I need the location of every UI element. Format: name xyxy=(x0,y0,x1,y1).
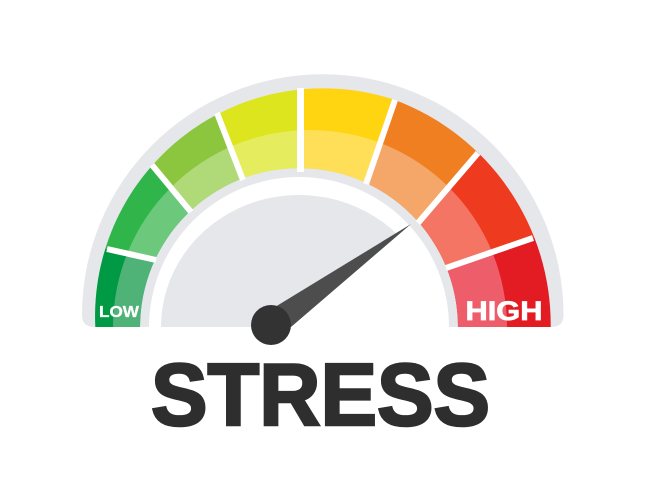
pale segment: green xyxy=(128,190,188,257)
pale segment: yellow xyxy=(233,130,297,178)
segment: gold xyxy=(304,88,395,182)
segment: red orange xyxy=(420,152,534,265)
gauge segments, pale inner band xyxy=(113,130,507,327)
segment: low dark green xyxy=(95,248,154,327)
pale segment: yellow green xyxy=(173,148,240,209)
label: LOW: LOW xyxy=(99,304,140,321)
gauge segments, saturated outer band xyxy=(95,88,551,327)
segment: yellow xyxy=(220,90,297,178)
stress gauge infographic xyxy=(82,74,564,428)
inner grey dome xyxy=(161,195,398,327)
pale segment: high red xyxy=(448,255,507,327)
gauge outer grey arc xyxy=(82,74,564,327)
segment: green xyxy=(105,168,188,257)
pale segment: red orange xyxy=(420,190,491,265)
white separators between segments xyxy=(107,88,533,268)
title: STRESS: STRESS xyxy=(151,345,490,444)
pale segment: orange xyxy=(369,144,446,220)
white inner cutout xyxy=(149,177,449,327)
pale segment: low green xyxy=(113,256,154,327)
needle xyxy=(275,224,411,327)
label: HIGH: HIGH xyxy=(466,296,542,326)
segment: yellow green xyxy=(154,116,240,209)
needle hub xyxy=(251,305,291,345)
pale segment: gold xyxy=(304,130,378,182)
segment: orange xyxy=(369,100,478,220)
segment: high red xyxy=(448,238,551,327)
